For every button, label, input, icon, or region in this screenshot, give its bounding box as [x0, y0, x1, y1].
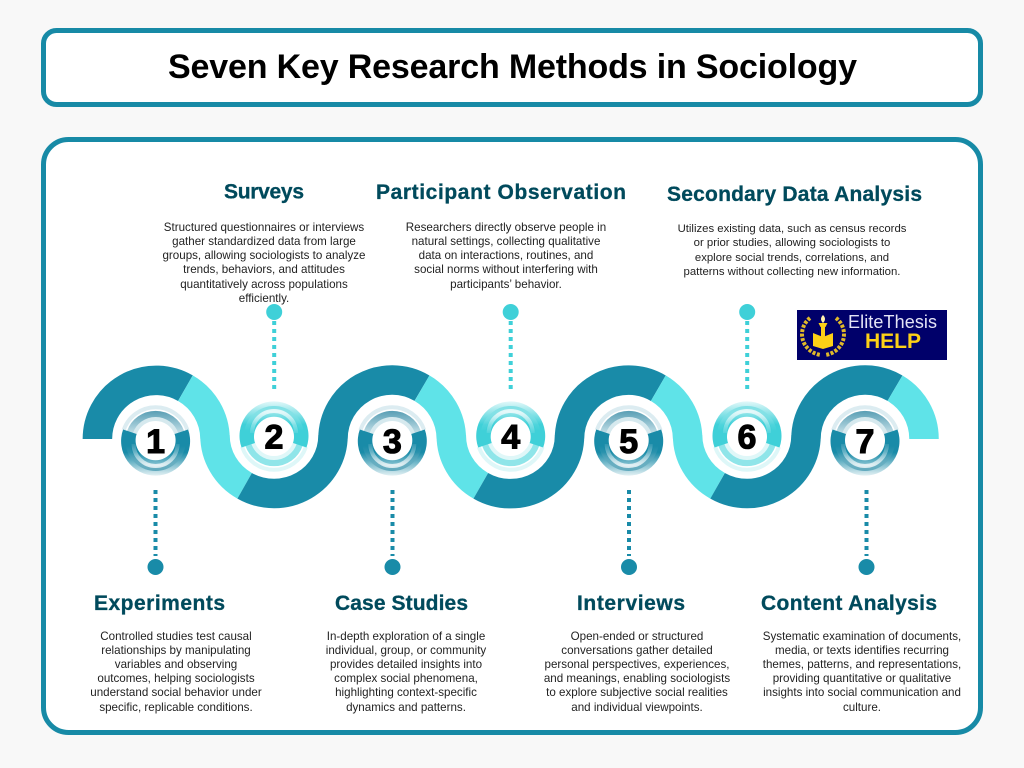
- body: Interviews: personal perspectives, experiences,: [545, 658, 729, 671]
- icon: number ring 4: [476, 401, 545, 470]
- body: Content Analysis: providing quantitative or qualitative: [773, 672, 951, 685]
- text block: Surveys: [162, 180, 366, 305]
- body: Experiments: specific, replicable conditions.: [99, 701, 253, 714]
- panel: main content: [44, 140, 980, 732]
- body: Content Analysis: [763, 630, 961, 714]
- text block: Experiments: [90, 592, 262, 714]
- body: Participant Observation: participants’ behavior.: [450, 278, 562, 291]
- heading: Surveys: Surveys: [224, 180, 304, 204]
- body: Interviews: and individual viewpoints.: [571, 701, 703, 714]
- icon: number ring 1: [121, 407, 190, 476]
- body: Case Studies: In-depth exploration of a single: [327, 630, 485, 643]
- text block: Participant Observation: [376, 181, 626, 291]
- connector: step 2: [266, 304, 282, 389]
- text block: Interviews: [544, 592, 730, 714]
- body: Case Studies: individual, group, or community: [326, 644, 486, 657]
- connector: step 1: [148, 490, 164, 575]
- body: Interviews: to explore subjective social realities: [546, 686, 728, 699]
- logo subtitle: HELP: [865, 330, 921, 353]
- body: Experiments: understand social behavior under: [90, 686, 262, 699]
- body: Participant Observation: natural settings, collecting qualitative: [412, 235, 600, 248]
- icon: number ring 3: [358, 407, 427, 476]
- icon: number ring 3: 3: [383, 423, 402, 461]
- body: Content Analysis: insights into social communication and: [763, 686, 961, 699]
- icon: number ring 6: 6: [738, 418, 756, 456]
- chart: wave ribbon: [97, 380, 924, 494]
- connector: step 4: [503, 304, 519, 389]
- body: Case Studies: provides detailed insights into: [330, 658, 482, 671]
- logo wordmark: EliteThesis: [848, 312, 937, 332]
- heading: Participant Observation: Participant Observation: [376, 181, 626, 204]
- body: Secondary Data Analysis: patterns without collecting new information.: [684, 266, 900, 278]
- heading: Case Studies: Case Studies: [335, 592, 468, 615]
- icon: number ring 2: [240, 401, 308, 470]
- connector: step 5: [621, 490, 637, 575]
- body: Case Studies: [326, 630, 486, 714]
- heading: Interviews: Interviews: [577, 592, 685, 615]
- body: Interviews: Open-ended or structured: [571, 630, 703, 643]
- body: Interviews: conversations gather detailed: [561, 644, 713, 657]
- body: Surveys: groups, allowing sociologists to analyze: [162, 249, 366, 262]
- connector: step 3: [384, 490, 400, 575]
- connector: step 6: [739, 304, 755, 389]
- body: Surveys: [162, 221, 366, 305]
- icon: number ring 2: 2: [265, 418, 283, 456]
- body: Case Studies: dynamics and patterns.: [346, 701, 466, 714]
- body: Surveys: Structured questionnaires or interviews: [164, 221, 364, 234]
- body: Surveys: quantitatively across populations: [180, 278, 348, 291]
- body: Participant Observation: [406, 221, 606, 291]
- body: Interviews: [544, 630, 730, 714]
- body: Content Analysis: Systematic examination of documents,: [763, 630, 961, 643]
- body: Secondary Data Analysis: or prior studies, allowing sociologists to: [694, 237, 890, 249]
- heading: Experiments: Experiments: [94, 592, 225, 615]
- logo: EliteThesis Help: [797, 310, 947, 360]
- body: Surveys: trends, behaviors, and attitudes: [183, 263, 345, 276]
- body: Participant Observation: Researchers directly observe people in: [406, 221, 606, 234]
- body: Participant Observation: data on interactions, routines, and: [419, 249, 593, 262]
- text block: Content Analysis: [761, 592, 961, 714]
- body: Surveys: gather standardized data from large: [172, 235, 356, 248]
- heading: Content Analysis: Content Analysis: [761, 592, 937, 615]
- body: Experiments: Controlled studies test causal: [100, 630, 252, 643]
- body: Secondary Data Analysis: Utilizes existing data, such as census records: [678, 223, 907, 235]
- body: Interviews: and meanings, enabling sociologists: [544, 672, 730, 685]
- icon: number ring 5: [594, 407, 663, 476]
- connector: step 7: [858, 490, 874, 575]
- heading: Secondary Data Analysis: Secondary Data Analysis: [667, 183, 922, 206]
- icon: number ring 4: 4: [501, 418, 520, 456]
- icon: number ring 7: [830, 407, 900, 476]
- body: Secondary Data Analysis: explore social trends, correlations, and: [695, 252, 889, 264]
- text block: Secondary Data Analysis: [667, 183, 922, 278]
- body: Experiments: [90, 630, 262, 714]
- body: Surveys: efficiently.: [239, 292, 289, 305]
- text block: Case Studies: [326, 592, 486, 714]
- icon: number ring 7: 7: [856, 423, 874, 461]
- title: Seven Key Research Methods in Sociology: [168, 48, 857, 86]
- body: Experiments: relationships by manipulating: [101, 644, 251, 657]
- icon: number ring 5: 5: [619, 423, 638, 461]
- body: Case Studies: highlighting context-specific: [335, 686, 477, 699]
- body: Secondary Data Analysis: [678, 223, 907, 278]
- body: Experiments: variables and observing: [115, 658, 237, 671]
- body: Content Analysis: culture.: [843, 701, 881, 714]
- body: Content Analysis: media, or texts identifies recurring: [775, 644, 949, 657]
- panel: title box: [44, 30, 980, 104]
- body: Case Studies: complex social phenomena,: [334, 672, 478, 685]
- body: Participant Observation: social norms without interfering with: [414, 263, 598, 276]
- body: Experiments: outcomes, helping sociologists: [97, 672, 255, 685]
- icon: laurel, torch and book: [802, 315, 844, 355]
- body: Content Analysis: themes, patterns, and representations,: [763, 658, 961, 671]
- icon: number ring 6: [712, 401, 782, 470]
- icon: number ring 1: 1: [146, 423, 165, 461]
